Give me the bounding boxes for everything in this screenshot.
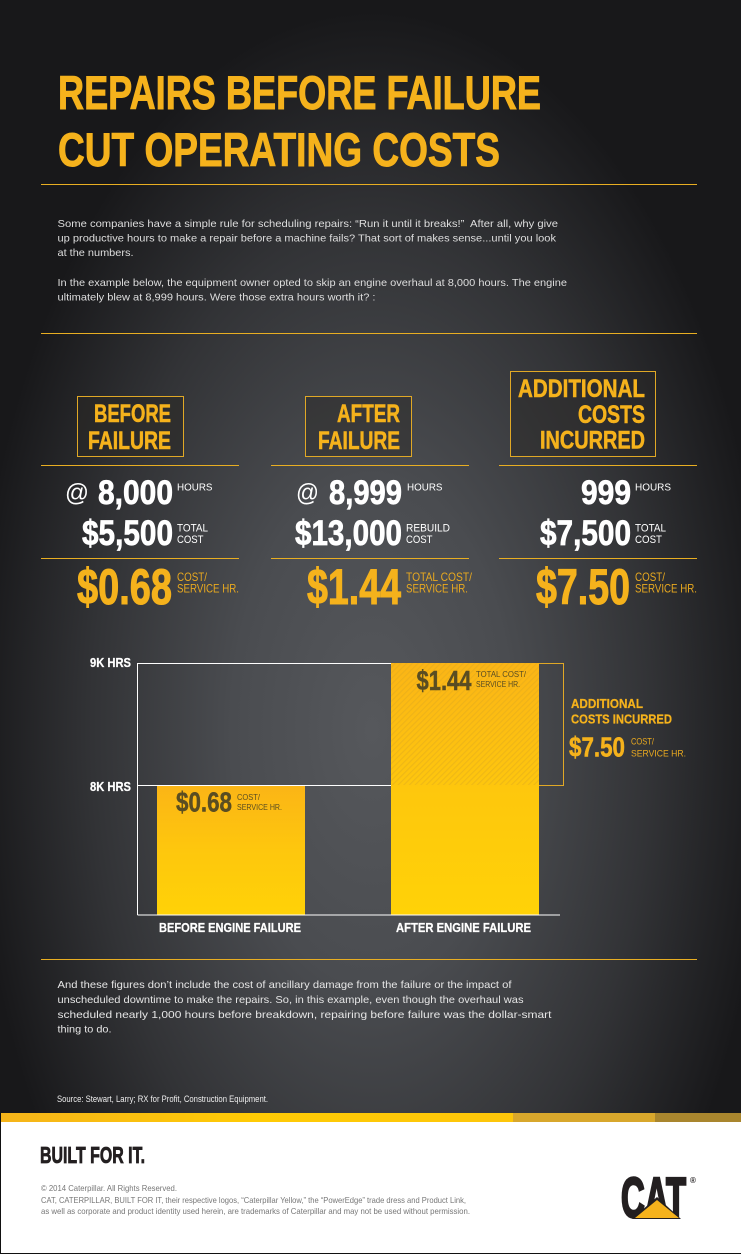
legal text <box>41 1183 470 1216</box>
closing text: unscheduled downtime to make the repairs. So, in this example, even though the overhaul was <box>58 995 524 1006</box>
heading: after failure: AFTER <box>337 400 400 428</box>
callout: additional costs incurred: COST/ <box>631 736 654 748</box>
bar: before engine failure <box>157 786 305 915</box>
legal text: as well as corporate and product identity used herein, are trademarks of Caterpillar and may not be used without permission. <box>41 1206 470 1216</box>
hours at 8,000: HOURS <box>177 482 213 494</box>
cost per service hour $7.50: SERVICE HR. <box>635 582 697 596</box>
hours at 8,000 <box>65 474 213 512</box>
bracket: additional hours <box>539 664 564 786</box>
cost per service hour $1.44: $1.44 <box>307 559 401 615</box>
source note: Source: Stewart, Larry; RX for Profit, Construction Equipment. <box>57 1094 268 1104</box>
hours 999 <box>581 474 671 512</box>
bar: before engine failure: SERVICE HR. <box>237 802 282 812</box>
category label: before engine failure: BEFORE ENGINE FAILURE <box>159 920 301 935</box>
closing text: scheduled nearly 1,000 hours before breakdown, repairing before failure was the dollar-smart <box>58 1010 552 1021</box>
closing text: thing to do. <box>58 1024 112 1036</box>
total cost $7,500: TOTAL <box>635 522 666 534</box>
legal text: CAT, CATERPILLAR, BUILT FOR IT, their respective logos, “Caterpillar Yellow,” the “PowerEdge” trade dress and Product Link, <box>41 1195 466 1205</box>
hours at 8,000: 8,000 <box>98 474 173 512</box>
panel: after failure <box>271 396 473 615</box>
cost per service hour $1.44: TOTAL COST/ <box>406 570 473 584</box>
total cost $5,500: TOTAL <box>177 522 208 534</box>
total cost $5,500: $5,500 <box>82 514 173 553</box>
callout: additional costs incurred: ADDITIONAL <box>571 697 643 711</box>
panel: additional costs incurred <box>499 372 697 615</box>
heading: additional costs incurred <box>510 372 656 456</box>
hours at 8,999: @ <box>296 479 319 507</box>
panel: before failure <box>41 396 239 615</box>
bar: after engine failure: SERVICE HR. <box>476 679 520 689</box>
logo: CAT: ® <box>690 1176 696 1185</box>
intro text: In the example below, the equipment owner opted to skip an engine overhaul at 8,000 hours. The engine <box>58 278 567 289</box>
logo: CAT <box>621 1166 696 1230</box>
total cost $7,500: COST <box>635 534 662 546</box>
heading: additional costs incurred: ADDITIONAL <box>518 375 645 403</box>
hours at 8,000: @ <box>65 479 89 507</box>
tagline: built for it: BUILT FOR IT. <box>40 1142 145 1168</box>
cost per service hour $0.68: COST/ <box>177 570 208 584</box>
callout: additional costs incurred: SERVICE HR. <box>631 748 686 760</box>
hours at 8,999 <box>296 474 443 512</box>
title: REPAIRS BEFORE FAILURE <box>58 66 541 119</box>
cost per service hour $7.50: COST/ <box>635 570 666 584</box>
axis label: 8K hours: 8K HRS <box>90 779 131 794</box>
heading: before failure: BEFORE <box>94 400 171 428</box>
hours at 8,999: HOURS <box>407 482 443 494</box>
cost per service hour $0.68: $0.68 <box>77 559 172 615</box>
legal text: © 2014 Caterpillar. All Rights Reserved. <box>41 1183 177 1193</box>
category label: after engine failure: AFTER ENGINE FAILURE <box>396 920 531 935</box>
title: CUT OPERATING COSTS <box>58 123 500 176</box>
callout: additional costs incurred: COSTS INCURRED <box>571 712 672 726</box>
intro text: up productive hours to make a repair before a machine fails? That sort of makes sense...until you look <box>58 234 557 244</box>
closing text <box>58 980 552 1036</box>
callout: additional costs incurred <box>569 697 686 762</box>
bar: before engine failure: $0.68 <box>176 786 232 818</box>
footer <box>0 1113 741 1254</box>
logo: CAT: CAT <box>621 1166 686 1230</box>
total cost $5,500: COST <box>177 534 204 546</box>
rebuild cost $13,000: REBUILD <box>406 522 450 534</box>
heading: before failure <box>78 396 184 456</box>
bar: before engine failure: COST/ <box>237 792 261 802</box>
axis label: 9K hours: 9K HRS <box>90 655 131 670</box>
heading: additional costs incurred: COSTS <box>578 401 645 429</box>
bar: after engine failure: $1.44 <box>416 665 472 696</box>
intro text: ultimately blew at 8,999 hours. Were those extra hours worth it? : <box>58 292 376 304</box>
hours 999: 999 <box>581 474 631 512</box>
rebuild cost $13,000: COST <box>406 534 433 546</box>
cost per service hour $1.44: SERVICE HR. <box>406 582 468 596</box>
total cost $7,500: $7,500 <box>540 514 631 553</box>
closing text: And these figures don’t include the cost of ancillary damage from the failure or the impact of <box>58 980 512 991</box>
bar: after engine failure <box>391 663 539 915</box>
bar chart: hours before and after engine failure <box>90 655 686 935</box>
heading: after failure <box>306 396 412 456</box>
footer band <box>0 1113 741 1122</box>
heading: before failure: FAILURE <box>88 427 171 455</box>
bar: after engine failure: TOTAL COST/ <box>476 669 527 679</box>
cost per service hour $0.68: SERVICE HR. <box>177 582 239 596</box>
heading: after failure: FAILURE <box>318 427 400 455</box>
title <box>58 66 541 176</box>
hours at 8,999: 8,999 <box>329 474 402 512</box>
rebuild cost $13,000: $13,000 <box>295 514 402 553</box>
intro text: at the numbers. <box>58 248 134 259</box>
cost per service hour $7.50: $7.50 <box>536 559 630 615</box>
hours 999: HOURS <box>635 482 671 494</box>
heading: additional costs incurred: INCURRED <box>540 426 645 454</box>
callout: additional costs incurred: $7.50 <box>569 732 625 762</box>
intro text <box>58 219 567 304</box>
intro text: Some companies have a simple rule for scheduling repairs: “Run it until it breaks!” After all, why give <box>58 219 558 230</box>
